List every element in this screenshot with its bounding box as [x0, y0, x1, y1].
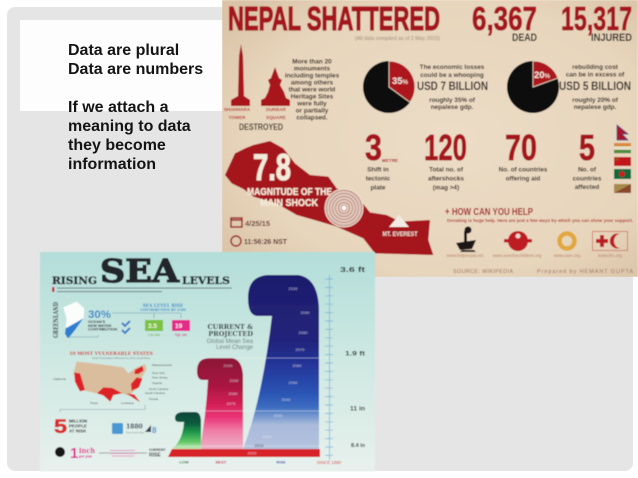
- heading: Rising Sea Levels: LEVELS: [182, 276, 230, 287]
- stat: 120 aftershocks: 120: [424, 127, 467, 168]
- chart subtitle: Global Mean Sea: [207, 339, 254, 345]
- tower labels: [224, 107, 287, 120]
- state labels: Florida: [149, 397, 159, 401]
- text: economic losses: roughly 35% of: [429, 97, 476, 104]
- stat: 30 percent ocean's new water: 30%: [88, 309, 111, 321]
- magnitude callout: [247, 147, 332, 209]
- blue high scenario numeral: [243, 275, 319, 449]
- stat: 3 metre shift: Shift in: [367, 166, 389, 174]
- level lines: [175, 358, 350, 446]
- text: monuments collapsed: among others: [291, 80, 334, 86]
- heading: Rising Sea Levels: SEA: [100, 252, 180, 290]
- panel: Nepal Shattered infographic: [222, 0, 638, 277]
- stat: 3 metre shift: [365, 127, 398, 192]
- sea level rise contribution: CONTRIBUTION BY 2100: [140, 308, 187, 312]
- text block: data versus information: Data are numbers: [68, 61, 203, 78]
- year labels: 2060: [293, 363, 302, 368]
- source credit: SOURCE: WIKIPEDIA: [453, 269, 513, 275]
- connector line: [60, 405, 145, 412]
- stat: 5 million people at risk: PEOPLE: [69, 424, 87, 428]
- organisation links: www.helpnepal.net: [447, 253, 484, 258]
- text: economic losses: nepalese gdp.: [431, 104, 474, 111]
- icon: Durbar Square temple: [261, 67, 290, 106]
- arrow: current rise: [99, 452, 147, 454]
- stat: 5 countries affected: [572, 134, 602, 190]
- state labels: Virginia: [152, 381, 162, 385]
- year labels: 2030: [274, 413, 283, 418]
- stat: 5 million people at risk: [54, 417, 87, 438]
- stat: 120 aftershocks: Total no. of: [429, 166, 464, 174]
- scale labels: 8.4 in: [351, 443, 366, 449]
- text: rebuilding cost: rebuilding cost: [572, 64, 619, 71]
- vulnerable states in red: [74, 366, 144, 402]
- text: monuments collapsed: including temples: [285, 72, 340, 80]
- text block: data versus information: they become: [68, 137, 166, 154]
- stat: 1880 calendar: Sea level rises: [126, 430, 145, 434]
- organisation links: [447, 253, 623, 258]
- stat: 8 inches: [145, 425, 157, 435]
- stat: 1880 calendar: [112, 423, 145, 434]
- heading: vulnerable states: Total Population Affected by Sea Level Rise: [92, 356, 150, 360]
- base red bar: [168, 449, 320, 457]
- white title box: [20, 20, 223, 111]
- stat: 1 inch per year: inch: [79, 446, 95, 455]
- icon: save the children: [504, 231, 532, 251]
- scenario labels: SINCE 1880: [317, 460, 342, 465]
- scenario labels: RISK: [276, 460, 286, 464]
- magnitude callout: 7.8: [253, 147, 291, 188]
- stat: dead: DEAD: [512, 32, 537, 44]
- how can you help heading: + HOW CAN YOU HELP: [445, 206, 533, 218]
- US map: [73, 362, 147, 402]
- Mt Everest marker: MT. EVEREST: [382, 232, 418, 238]
- time: [231, 236, 287, 246]
- stat: 3 metre shift: tectonic: [366, 176, 391, 182]
- stat: 3 metre shift: METRE: [382, 158, 398, 163]
- scenario labels: BEST: [216, 460, 227, 464]
- help intro line: Donating is huge help. Here are just a few ways by which you can show your support.: [447, 218, 633, 223]
- stat: 5 countries affected: affected: [575, 184, 599, 191]
- text: rebuilding cost: nepalese gdp.: [574, 104, 617, 111]
- tower labels: SHAHHARA: [224, 107, 251, 112]
- scale labels: [340, 267, 366, 449]
- year labels: 2080: [229, 391, 238, 396]
- current rise label: RISE: [149, 452, 161, 458]
- heading: Rising Sea Levels: RISING: [52, 276, 97, 287]
- pie chart: 35 percent: 35%: [392, 76, 409, 87]
- stat: dead: [472, 6, 538, 42]
- heading: Rising Sea Levels: [52, 252, 230, 290]
- sea level rise contribution: SEA LEVEL RISE: [143, 304, 184, 309]
- sea level rise contribution: [140, 304, 187, 312]
- tower labels: TOWER: [228, 115, 246, 120]
- text: economic losses: The economic losses: [420, 64, 485, 71]
- time: 11:56:26 NST: [244, 237, 287, 246]
- stat: 5 countries affected: No. of: [578, 166, 597, 174]
- stat: 5 million people at risk: AT RISK: [69, 428, 87, 434]
- stat: 70 countries aid: offering aid: [506, 176, 540, 182]
- Mt Everest marker: [382, 215, 418, 238]
- flags of affected countries: [614, 125, 631, 193]
- red best scenario numeral: [197, 358, 243, 449]
- green box: 3.5: [145, 320, 163, 337]
- stat: 3 metre shift: plate: [371, 184, 386, 192]
- stat: injured: INJURED: [591, 32, 632, 44]
- text: economic losses: could be a whooping: [420, 72, 484, 79]
- scale labels: 1.9 ft: [345, 350, 366, 358]
- pie chart: 20 percent: [507, 61, 559, 113]
- green box: 3.5: Low rate: [148, 333, 160, 337]
- year labels: 2070: [296, 347, 305, 352]
- state labels: New York: [152, 371, 165, 375]
- stat: 70 countries aid: 70: [505, 127, 537, 168]
- author credit: Prepared by HEMANT GUPTA: [537, 269, 633, 275]
- epicentre rings: [325, 189, 363, 227]
- icon: help nepal: [456, 226, 476, 252]
- destroyed label: DESTROYED: [239, 122, 283, 132]
- year labels: 2100: [224, 363, 233, 368]
- text: rebuilding cost: can be in excess of: [566, 72, 625, 78]
- text: monuments collapsed: collapsed.: [296, 114, 328, 122]
- text block: data versus information: information: [68, 156, 156, 173]
- stat: 120 aftershocks: aftershocks: [428, 176, 464, 182]
- icon: red cross and crescent: [592, 232, 628, 250]
- state labels: New Jersey: [152, 376, 168, 380]
- green low scenario numeral: [172, 412, 201, 449]
- organisation links: www.ifrc.org: [598, 253, 623, 258]
- icon: Dharahara tower: [231, 44, 250, 106]
- stat: 120 aftershocks: [424, 134, 467, 192]
- state labels: North Carolina: [149, 387, 169, 391]
- stat: 70 countries aid: [498, 134, 548, 182]
- map of Nepal: [225, 141, 433, 255]
- year labels: 2090: [230, 378, 239, 383]
- text block: data versus information: meaning to data: [68, 118, 191, 135]
- green box: 3.5: 3.5: [148, 323, 157, 330]
- state labels: Louisiana: [121, 401, 134, 405]
- scenario labels: [179, 460, 342, 465]
- text: rebuilding cost: [559, 64, 631, 111]
- magnitude callout: MAIN SHOCK: [260, 197, 318, 209]
- icon: check marks: [122, 321, 130, 333]
- text: monuments collapsed: or partially: [296, 108, 329, 114]
- state labels: South Carolina: [145, 391, 165, 395]
- icon: care: [560, 234, 574, 248]
- stat: 1 inch per year: 1: [70, 445, 78, 462]
- stat: 30 percent ocean's new water: NEW WATER: [88, 324, 112, 328]
- chart subtitle: PROJECTED: [208, 330, 253, 338]
- stat: 1880 calendar: 1880: [126, 424, 143, 430]
- pie chart: 35 percent: [363, 61, 415, 113]
- pink box: 19: 19: [175, 323, 183, 330]
- date: [231, 218, 270, 228]
- chart: projected sea level rise: [168, 275, 350, 460]
- organisation links: www.savethechildren.org: [493, 253, 542, 258]
- text: monuments collapsed: monuments: [294, 66, 331, 72]
- connector line: [66, 313, 181, 337]
- heading: Nepal Shattered: NEPAL SHATTERED: [228, 0, 440, 37]
- stat: 30 percent ocean's new water: OCEAN'S: [88, 320, 106, 324]
- scale labels: 3.6 ft: [340, 267, 366, 274]
- scale labels: 11 in: [350, 406, 365, 412]
- pink box: 19: high rate: [175, 333, 187, 337]
- year labels: 2080: [299, 330, 308, 335]
- text: monuments collapsed: Heritage Sites: [291, 94, 334, 100]
- stat: 1 inch per year: [55, 445, 95, 462]
- text: monuments collapsed: were fully: [296, 100, 327, 108]
- stat: 8 inches: 8: [152, 426, 157, 435]
- stat: 5 countries affected: 5: [579, 127, 595, 168]
- tower labels: SQUARE: [266, 115, 286, 120]
- stat: 5 million people at risk: 5: [54, 417, 68, 438]
- stat: 30 percent ocean's new water: [88, 309, 117, 332]
- text block: data versus information: If we attach a: [68, 99, 169, 116]
- current rise label: [149, 448, 167, 458]
- scenario labels: LOW: [179, 460, 189, 464]
- text: monuments collapsed: that were world: [289, 86, 336, 94]
- intro text lines: [52, 287, 232, 292]
- stat: 70 countries aid: No. of countries: [499, 166, 548, 174]
- year labels: 2040: [282, 397, 291, 402]
- year labels: 2020: [263, 434, 272, 439]
- year labels: 2000: [248, 450, 257, 456]
- text: rebuilding cost: roughly 20% of: [572, 97, 619, 104]
- heading: vulnerable states: [69, 351, 153, 360]
- current rise label: CURRENT: [149, 448, 167, 452]
- tower labels: DURBAR: [266, 107, 287, 112]
- panel: Rising Sea Levels infographic: [40, 252, 375, 472]
- year labels: 2090: [301, 310, 310, 315]
- pie chart: 20 percent: 20%: [534, 70, 551, 81]
- state labels: Texas: [90, 401, 98, 405]
- text: economic losses: USD 7 BILLION: [417, 81, 488, 93]
- Greenland map: [63, 302, 84, 338]
- stat: 30 percent ocean's new water: CONTRIBUTION: [88, 328, 117, 332]
- stat: 5 countries affected: countries: [573, 176, 602, 182]
- Greenland label: GREENLAND: [53, 302, 60, 338]
- state labels: Massachusetts: [152, 363, 173, 367]
- year labels: 2050: [289, 380, 298, 385]
- data note: (All data compiled as of 2 May 2015): [355, 36, 440, 42]
- year labels: 2100: [289, 286, 298, 291]
- organisation links: www.care.org: [554, 253, 581, 258]
- text block: data versus information: [68, 42, 203, 173]
- stat: injured: [562, 6, 632, 42]
- text: monuments collapsed: [285, 58, 340, 122]
- state labels: California: [53, 377, 66, 381]
- heading: vulnerable states: 10 MOST VULNERABLE STATES: [69, 351, 153, 357]
- stat: 1 inch per year: per year: [79, 454, 93, 458]
- date: 4/25/15: [245, 219, 270, 228]
- chart subtitle: CURRENT &: [207, 323, 253, 331]
- vertical scale axis: [325, 275, 333, 460]
- stat: 120 aftershocks: (mag >4): [433, 184, 459, 192]
- text: monuments collapsed: More than 20: [292, 58, 332, 66]
- stat: dead: 6,367: [472, 0, 537, 37]
- stat: 5 million people at risk: MILLION: [69, 418, 87, 424]
- pink caption lines: [110, 450, 137, 456]
- text block: data versus information: Data are plural: [68, 42, 179, 59]
- state labels: [53, 363, 173, 405]
- year labels: 2070: [227, 401, 236, 406]
- text: economic losses: [417, 64, 488, 111]
- year labels: 2010: [255, 443, 264, 448]
- year labels: [224, 286, 310, 456]
- pink box: 19: [172, 320, 190, 337]
- stat: 3 metre shift: 3: [365, 127, 382, 168]
- chart subtitle: [207, 323, 254, 351]
- chart subtitle: Level Change: [216, 345, 254, 351]
- magnitude callout: MAGNITUDE OF THE: [247, 186, 332, 198]
